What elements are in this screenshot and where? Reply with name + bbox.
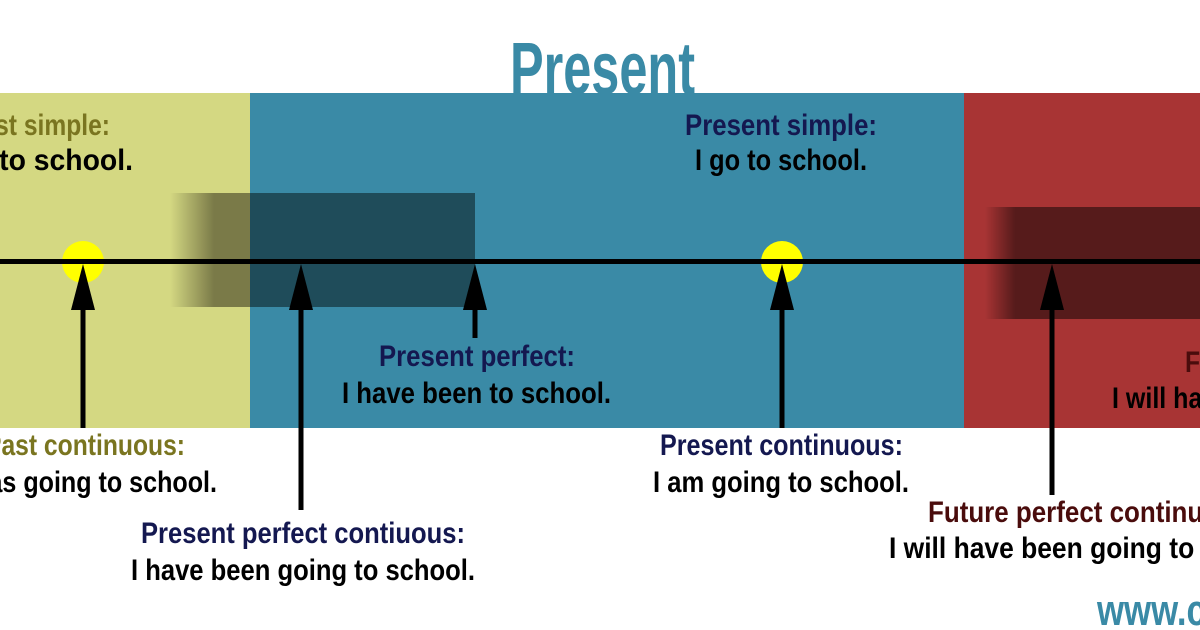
text: future perfect continuous: [889, 496, 1200, 565]
shaded span: past-present: [170, 193, 475, 307]
text: present perfect: [342, 340, 611, 410]
text: past continuous: [0, 429, 217, 499]
panel: future: [964, 93, 1200, 428]
text: present simple: Present simple:: [685, 109, 877, 142]
shaded span: future: [985, 207, 1200, 319]
title: Present: [510, 27, 695, 110]
text: past simple: [0, 109, 133, 177]
text: present simple: I go to school.: [695, 144, 867, 177]
text: present simple: [685, 109, 877, 177]
text: present continuous: [653, 429, 909, 499]
text: present continuous: Present continuous:: [660, 429, 903, 462]
panel: present: [250, 93, 964, 428]
text: present perfect: I have been to school.: [342, 377, 611, 410]
text: present perfect: Present perfect:: [379, 340, 575, 373]
text: present perfect continuous: Present perfect contiuous:: [141, 517, 465, 550]
text: present perfect continuous: I have been going to school.: [131, 554, 475, 587]
text: present perfect continuous: [131, 517, 475, 587]
panel: past: [0, 93, 250, 428]
text: future simple: [1112, 346, 1200, 415]
timeline: [0, 259, 1200, 264]
yellow dots: [62, 241, 803, 283]
arrows: [71, 264, 1064, 510]
text: present continuous: I am going to school.: [653, 466, 909, 499]
